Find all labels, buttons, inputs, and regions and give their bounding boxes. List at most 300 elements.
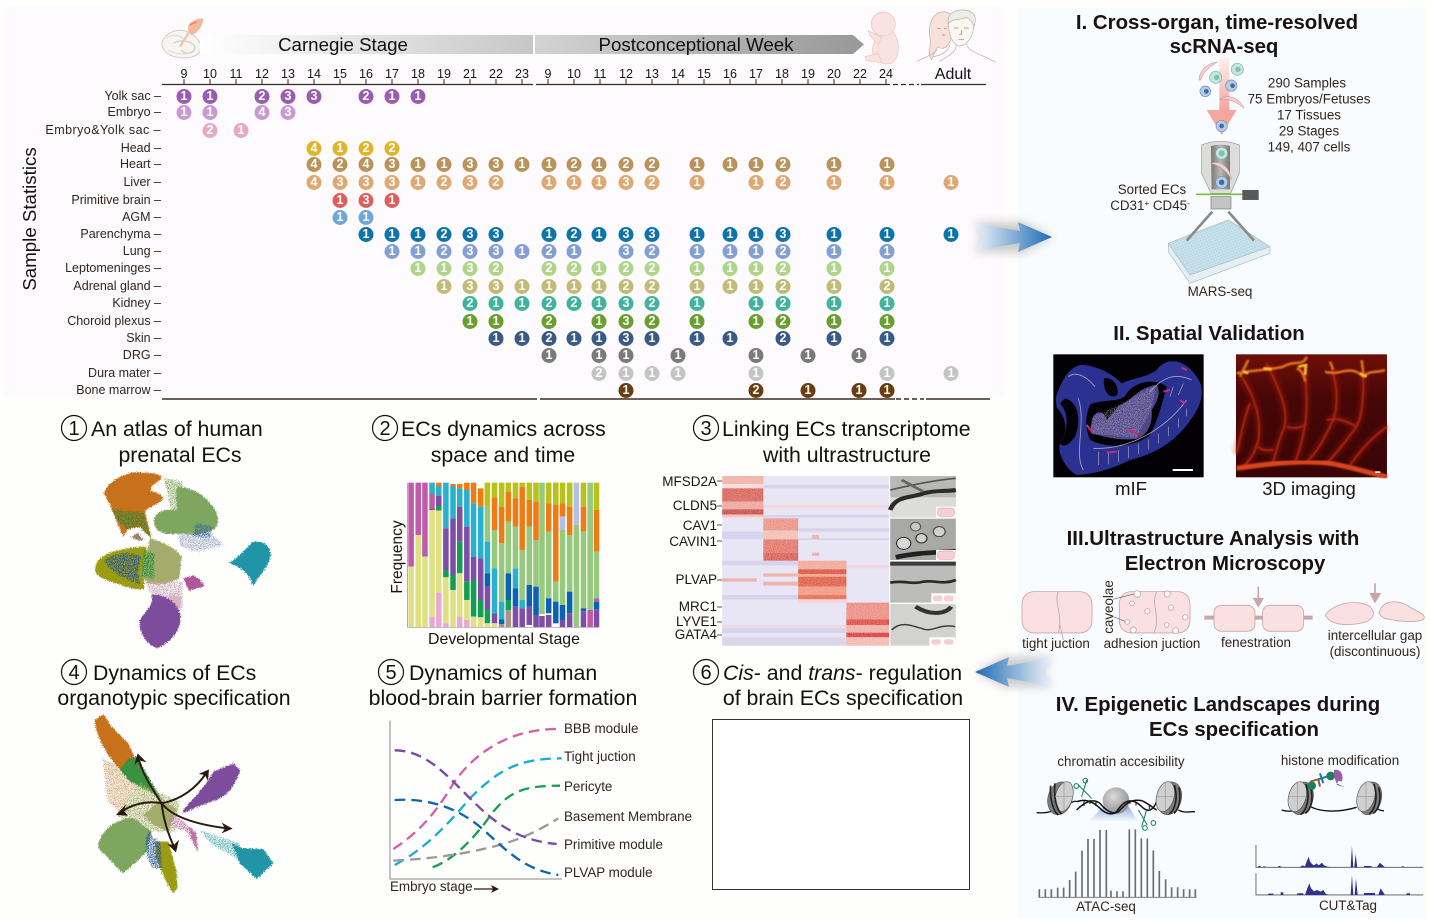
- heading 5: BBB formation: blood-brain barrier formation: [369, 686, 637, 710]
- row: DRG: 1: [596, 348, 602, 362]
- row: Kidney: 3: [623, 296, 629, 310]
- row: Leptomeninges: 3: [467, 261, 473, 275]
- row: Adrenal gland: 3: [493, 279, 499, 293]
- row: Heart: 1: [727, 157, 733, 171]
- row: Liver: 3: [363, 174, 369, 188]
- row: Heart: 1: [694, 157, 700, 171]
- axis: stage ticks: 14: [307, 67, 321, 81]
- row: Kidney: Kidney –: [112, 296, 161, 310]
- row: Liver: 3: [389, 174, 395, 188]
- heading band: Postconceptional Week: [535, 34, 864, 55]
- chart: trajectory embedding: [94, 714, 273, 893]
- row: Bone marrow: 1: [884, 383, 890, 397]
- row: Liver: 1: [546, 174, 552, 188]
- row: Liver: 1: [753, 174, 759, 188]
- row: Yolk sac: 2: [259, 88, 265, 102]
- row: Liver: 4: [311, 174, 317, 188]
- text: sample summary: 290 Samples: [1268, 76, 1346, 90]
- heading 2: dynamics across space and time: space and time: [431, 443, 575, 467]
- row: Yolk sac: 3: [311, 88, 317, 102]
- row: Choroid plexus: 1: [467, 314, 473, 328]
- text: sample summary: [1248, 76, 1371, 154]
- row: Parenchyma: 1: [831, 226, 837, 240]
- labels: marker genes: MRC1: [679, 599, 717, 614]
- axis: stage ticks: 24: [879, 67, 893, 81]
- heading 1: atlas: An atlas of human: [91, 417, 263, 441]
- heading 3: linking transcriptome: Linking ECs transcriptome: [722, 417, 971, 441]
- heading II: spatial validation: II. Spatial Validation: [1113, 323, 1305, 345]
- row: Dura mater: 1: [753, 366, 759, 380]
- labels: marker genes: GATA4: [675, 627, 717, 642]
- row: Head: 2: [389, 140, 395, 154]
- chart: heatmap: [722, 476, 889, 646]
- row: AGM: 1: [363, 210, 369, 224]
- axis: stage ticks: 14: [671, 67, 685, 81]
- heading 4: organotypic specification: [57, 660, 291, 710]
- row: Heart: Heart –: [120, 157, 161, 171]
- row: Bone marrow: 1: [623, 383, 629, 397]
- row: Liver: 1: [415, 174, 421, 188]
- row: Bone marrow: 2: [753, 383, 759, 397]
- row: Adrenal gland: 1: [519, 279, 525, 293]
- row: DRG: 1: [623, 348, 629, 362]
- labels: module names: Basement Membrane: [564, 809, 692, 824]
- row: DRG: 1: [546, 348, 552, 362]
- axis: stage ticks: 22: [853, 67, 867, 81]
- row: Heart: 2: [337, 157, 343, 171]
- row: Lung: 2: [780, 244, 786, 258]
- labels: marker genes: LYVE1: [676, 614, 717, 629]
- row: Choroid plexus: 3: [623, 314, 629, 328]
- row: Lung: 1: [727, 244, 733, 258]
- heading 5: BBB formation: 5: [385, 662, 397, 684]
- labels: module names: Tight juction: [564, 749, 636, 764]
- illustration: sorting workflow: [1168, 57, 1270, 283]
- row: Liver: 2: [493, 174, 499, 188]
- row: Kidney: 2: [649, 296, 655, 310]
- row: Choroid plexus: 2: [649, 314, 655, 328]
- axis: stage ticks: 12: [255, 67, 269, 81]
- label: histone modification: histone modification: [1281, 753, 1399, 768]
- row: Lung: 3: [623, 244, 629, 258]
- row: Leptomeninges: Leptomeninges –: [65, 261, 161, 275]
- labels: marker genes: CAV1: [683, 518, 717, 533]
- row: Parenchyma: 3: [493, 226, 499, 240]
- axis: stage ticks: 16: [723, 67, 737, 81]
- row: Embryo: 1: [207, 105, 213, 119]
- row: Yolk sac: Yolk sac –: [104, 88, 161, 102]
- row: Lung: 1: [753, 244, 759, 258]
- row: Skin: Skin –: [126, 331, 161, 345]
- labels: marker genes: CAVIN1: [669, 534, 717, 549]
- icon: fetus: [865, 12, 898, 64]
- row: Kidney: 1: [493, 296, 499, 310]
- row: Parenchyma: [80, 226, 958, 242]
- row: Choroid plexus: 1: [493, 314, 499, 328]
- row: Parenchyma: 1: [389, 226, 395, 240]
- row: Yolk sac: 1: [181, 88, 187, 102]
- heading 6: cis and trans regulation: of brain ECs specification: [723, 686, 963, 710]
- row: Lung: 1: [831, 244, 837, 258]
- labels: marker genes: [662, 474, 722, 642]
- row: Skin: 1: [519, 331, 525, 345]
- row: Embryo & Yolk sac: [45, 123, 248, 138]
- chart: UMAP atlas: [95, 472, 271, 648]
- heading 4: organotypic specification: 4: [68, 662, 80, 684]
- axis: stage ticks: 12: [619, 67, 633, 81]
- labels: module names: Primitive module: [564, 837, 663, 852]
- image: 3D vasculature: [1236, 354, 1387, 477]
- row: Choroid plexus: 1: [884, 314, 890, 328]
- heading IV: epigenetic landscapes: IV. Epigenetic Landscapes during: [1056, 694, 1380, 716]
- row: Lung: 2: [546, 244, 552, 258]
- label: CUT&Tag: CUT&Tag: [1319, 898, 1377, 913]
- row: Heart: 1: [596, 157, 602, 171]
- axis: stage ticks: 9: [181, 67, 188, 81]
- row: Parenchyma: 1: [363, 226, 369, 240]
- row: Skin: 2: [546, 331, 552, 345]
- labels: marker genes: CLDN5: [673, 498, 717, 513]
- labels: module names: [564, 721, 692, 880]
- axis: stage ticks: 11: [594, 67, 607, 81]
- row: Kidney: 1: [519, 296, 525, 310]
- axis label: Embryo stage with arrow: Embryo stage: [390, 879, 473, 894]
- heading 2: dynamics across space and time: 2: [379, 418, 391, 440]
- panel: sample statistics background: [4, 6, 1004, 397]
- heading I: scRNA-seq: [1076, 12, 1358, 58]
- axis: stage ticks: 15: [333, 67, 347, 81]
- row: Dura mater: 1: [675, 366, 681, 380]
- label: sorted ECs: +: [1144, 199, 1149, 208]
- axis: stage ticks: 22: [489, 67, 503, 81]
- figure: electron micrographs: [890, 476, 956, 646]
- row: Dura mater: Dura mater –: [88, 366, 161, 380]
- chart: ATAC-seq bars: [1038, 829, 1197, 897]
- row: Lung: 3: [467, 244, 473, 258]
- row: Lung: Lung –: [123, 244, 161, 258]
- row: Skin: 1: [571, 331, 577, 345]
- row: Choroid plexus: 2: [780, 314, 786, 328]
- row: Liver: Liver –: [123, 174, 161, 188]
- row: Skin: 1: [493, 331, 499, 345]
- text: sample summary: 75 Embryos/Fetuses: [1248, 92, 1371, 106]
- row: Skin: 1: [727, 331, 733, 345]
- chart: stacked bars by developmental stage: [408, 483, 599, 627]
- row: Lung: 2: [649, 244, 655, 258]
- row: Heart: 1: [519, 157, 525, 171]
- row: Parenchyma: 2: [441, 226, 447, 240]
- row: Primitive brain: Primitive brain –: [71, 192, 161, 206]
- row: Parenchyma: 1: [948, 226, 954, 240]
- heading I: scRNA-seq: scRNA-seq: [1170, 36, 1278, 58]
- row: Heart: [120, 157, 894, 172]
- heading band: Carnegie Stage: Carnegie Stage: [278, 34, 408, 55]
- heading 6: cis and trans regulation: [694, 660, 963, 710]
- row: Skin: 1: [831, 331, 837, 345]
- row: Kidney: 1: [884, 296, 890, 310]
- row: Liver: 3: [623, 174, 629, 188]
- row: Choroid plexus: Choroid plexus –: [67, 314, 161, 328]
- row: Heart: 3: [493, 157, 499, 171]
- row: Embryo & Yolk sac: Embryo&Yolk sac –: [45, 123, 161, 137]
- heading 2: dynamics across space and time: ECs dynamics across: [401, 417, 606, 441]
- row: Leptomeninges: 1: [753, 261, 759, 275]
- row: Embryo: 4: [259, 105, 265, 119]
- text: sample summary: 149, 407 cells: [1268, 140, 1351, 154]
- row: Embryo: Embryo –: [108, 105, 161, 119]
- row: Choroid plexus: 2: [546, 314, 552, 328]
- empty chart frame: [712, 720, 970, 890]
- heading band: Postconceptional Week: Postconceptional Week: [599, 34, 794, 55]
- row: Lung: 3: [493, 244, 499, 258]
- row: DRG: 1: [856, 348, 862, 362]
- row: Leptomeninges: 2: [780, 261, 786, 275]
- row: Adrenal gland: Adrenal gland –: [73, 279, 161, 293]
- row: Leptomeninges: 1: [831, 261, 837, 275]
- row: Lung: 1: [694, 244, 700, 258]
- axis: stage ticks: 13: [645, 67, 659, 81]
- heading III: ultrastructure: [1067, 528, 1359, 575]
- heading 3: linking transcriptome: with ultrastructure: [762, 443, 931, 467]
- row: Kidney: 1: [596, 296, 602, 310]
- row: Lung: 1: [884, 244, 890, 258]
- row: Adrenal gland: 2: [623, 279, 629, 293]
- row: Parenchyma: 3: [623, 226, 629, 240]
- label: ATAC-seq: ATAC-seq: [1076, 899, 1136, 914]
- row: Bone marrow: 1: [856, 383, 862, 397]
- heading IV: epigenetic landscapes: ECs specification: [1149, 719, 1319, 741]
- row: DRG: 1: [753, 348, 759, 362]
- row: DRG: DRG –: [123, 348, 161, 362]
- axis: stage ticks: 23: [515, 67, 529, 81]
- row: Heart: 4: [311, 157, 317, 171]
- row: Heart: 2: [571, 157, 577, 171]
- row: Kidney: 2: [546, 296, 552, 310]
- label: intercellular gap: intercellular gap: [1328, 628, 1422, 643]
- row: Dura mater: 1: [623, 366, 629, 380]
- row: Yolk sac: 3: [285, 88, 291, 102]
- label: intercellular gap: (discontinuous): [1330, 644, 1420, 659]
- row: Liver: 1: [571, 174, 577, 188]
- arrow: to methods: [974, 222, 1052, 253]
- row: Adrenal gland: 1: [831, 279, 837, 293]
- row: Heart: 2: [623, 157, 629, 171]
- row: Head: 4: [311, 140, 317, 154]
- row: Leptomeninges: 2: [546, 261, 552, 275]
- axis: stage ticks: 18: [411, 67, 425, 81]
- row: Heart: 2: [780, 157, 786, 171]
- row: Lung: 1: [571, 244, 577, 258]
- row: Parenchyma: 1: [415, 226, 421, 240]
- heading 2: dynamics across space and time: [372, 416, 606, 467]
- row: Adrenal gland: 1: [546, 279, 552, 293]
- row: Skin: 1: [884, 331, 890, 345]
- heading 1: atlas: prenatal ECs: [118, 443, 242, 467]
- row: Yolk sac: 2: [363, 88, 369, 102]
- text: sample summary: 17 Tissues: [1277, 108, 1341, 122]
- axis: stage ticks: 10: [567, 67, 581, 81]
- axis: stage ticks: 11: [230, 67, 243, 81]
- row: Primitive brain: 1: [337, 192, 343, 206]
- row: Embryo & Yolk sac: 1: [238, 123, 244, 137]
- row: AGM: 1: [337, 210, 343, 224]
- row: Liver: 1: [694, 174, 700, 188]
- label: MARS-seq: MARS-seq: [1188, 284, 1252, 299]
- label: intercellular gap: [1328, 628, 1422, 659]
- arrow: from methods: [975, 657, 1052, 687]
- label: sorted ECs: CD31: [1110, 198, 1144, 213]
- row: Liver: 2: [649, 174, 655, 188]
- row: Choroid plexus: 1: [753, 314, 759, 328]
- heading 3: linking transcriptome: [694, 416, 971, 467]
- row: Adrenal gland: 1: [753, 279, 759, 293]
- row: Lung: 1: [389, 244, 395, 258]
- heading band: Carnegie Stage: [200, 34, 533, 55]
- row: Parenchyma: 2: [571, 226, 577, 240]
- labels: module names: BBB module: [564, 721, 638, 736]
- row: Liver: 2: [441, 174, 447, 188]
- row: Heart: 2: [649, 157, 655, 171]
- row: Parenchyma: 3: [649, 226, 655, 240]
- axis: stage ticks: 20: [827, 67, 841, 81]
- row: Leptomeninges: 1: [727, 261, 733, 275]
- row: Head: [121, 140, 400, 156]
- row: Yolk sac: [104, 88, 426, 104]
- row: Liver: 1: [831, 174, 837, 188]
- heading 4: organotypic specification: organotypic specification: [57, 686, 291, 710]
- row: Choroid plexus: 1: [596, 314, 602, 328]
- axis title: Frequency: Frequency: [389, 520, 406, 594]
- axis: stage ticks: 16: [359, 67, 373, 81]
- row: Skin: 1: [649, 331, 655, 345]
- row: Skin: 3: [623, 331, 629, 345]
- row: Liver: 1: [596, 174, 602, 188]
- heading III: ultrastructure: III.Ultrastructure Analysis with: [1067, 528, 1359, 550]
- row: Head: 1: [337, 140, 343, 154]
- axis: stage ticks: Adult: [935, 66, 972, 83]
- row: Adrenal gland: 1: [571, 279, 577, 293]
- label: fenestration: fenestration: [1221, 635, 1291, 650]
- row: Kidney: 2: [571, 296, 577, 310]
- row: Skin: [126, 331, 894, 346]
- row: Adrenal gland: 1: [596, 279, 602, 293]
- labels: module names: PLVAP module: [564, 865, 653, 880]
- row: Heart: 3: [467, 157, 473, 171]
- row: Adrenal gland: 2: [884, 279, 890, 293]
- row: Parenchyma: Parenchyma –: [80, 226, 161, 240]
- row: Embryo & Yolk sac: 2: [207, 123, 213, 137]
- row: Heart: 1: [831, 157, 837, 171]
- row: Kidney: 2: [780, 296, 786, 310]
- row: Dura mater: 2: [596, 366, 602, 380]
- axis: stage ticks: [162, 66, 986, 84]
- row: Adrenal gland: 1: [694, 279, 700, 293]
- row: Parenchyma: 1: [884, 226, 890, 240]
- image: mIF embryo section: [1053, 354, 1204, 477]
- label: caveolae: caveolae: [1101, 580, 1116, 634]
- row: Liver: 3: [467, 174, 473, 188]
- axis: stage ticks: 15: [697, 67, 711, 81]
- row: AGM: [122, 210, 374, 225]
- diagram: ATAC chromatin: [1037, 778, 1195, 830]
- row: Heart: 1: [441, 157, 447, 171]
- row: Primitive brain: [71, 192, 400, 208]
- row: Choroid plexus: 1: [831, 314, 837, 328]
- row: Heart: 4: [363, 157, 369, 171]
- heading 5: BBB formation: [369, 660, 637, 710]
- panel: methods background: [1017, 8, 1425, 918]
- row: Lung: 1: [415, 244, 421, 258]
- row: Leptomeninges: 1: [441, 261, 447, 275]
- row: Choroid plexus: [67, 314, 894, 329]
- chart: module dynamics curves: [390, 721, 562, 879]
- row: Adrenal gland: [73, 279, 894, 294]
- row: Lung: 2: [441, 244, 447, 258]
- chart: CUT and Tag tracks: [1256, 845, 1423, 895]
- axis: stage ticks: 13: [281, 67, 295, 81]
- row: Kidney: 2: [467, 296, 473, 310]
- row: Choroid plexus: 1: [694, 314, 700, 328]
- row: Liver: 1: [948, 174, 954, 188]
- row: Leptomeninges: [65, 261, 894, 276]
- row: Leptomeninges: 2: [649, 261, 655, 275]
- labels: module names: Pericyte: [564, 779, 612, 794]
- label: mIF: mIF: [1115, 478, 1147, 499]
- row: Skin: 1: [694, 331, 700, 345]
- heading 6: cis and trans regulation: 6: [700, 662, 712, 684]
- label: sorted ECs: Sorted ECs: [1118, 182, 1187, 197]
- heading III: ultrastructure: Electron Microscopy: [1125, 553, 1326, 575]
- row: Liver: 3: [337, 174, 343, 188]
- row: Heart: 1: [753, 157, 759, 171]
- row: AGM: AGM –: [122, 210, 161, 224]
- heading 6: cis and trans regulation: Cis- and trans- regulation: [723, 661, 962, 685]
- label: adhesion junction: adhesion juction: [1104, 636, 1200, 651]
- diagrams: junction types: [1022, 583, 1424, 640]
- row: Lung: 1: [519, 244, 525, 258]
- row: Embryo: [108, 105, 296, 120]
- label: sorted ECs: [1110, 182, 1190, 213]
- axis: stage ticks: 9: [545, 67, 552, 81]
- axis title: Sample Statistics: Sample Statistics: [19, 147, 40, 291]
- row: Adrenal gland: 1: [441, 279, 447, 293]
- row: Leptomeninges: 2: [571, 261, 577, 275]
- row: Yolk sac: 1: [207, 88, 213, 102]
- row: Embryo: 3: [285, 105, 291, 119]
- row: Embryo: 1: [181, 105, 187, 119]
- row: Adrenal gland: 2: [649, 279, 655, 293]
- axis: stage ticks: 21: [463, 67, 477, 81]
- row: Bone marrow: 1: [805, 383, 811, 397]
- row: DRG: 1: [675, 348, 681, 362]
- heading 5: BBB formation: Dynamics of human: [409, 661, 597, 685]
- row: Dura mater: 1: [948, 366, 954, 380]
- row: Heart: 1: [884, 157, 890, 171]
- heading 1: atlas: [62, 416, 263, 467]
- row: Parenchyma: 1: [546, 226, 552, 240]
- row: Parenchyma: 3: [780, 226, 786, 240]
- row: Skin: 2: [780, 331, 786, 345]
- axis: stage ticks: 17: [749, 67, 763, 81]
- row: Kidney: 1: [831, 296, 837, 310]
- axis title: Developmental Stage: Developmental Stage: [428, 631, 580, 648]
- diagram: histone modification: [1282, 770, 1385, 817]
- axis: stage ticks: 19: [801, 67, 815, 81]
- row: Kidney: 1: [694, 296, 700, 310]
- row: Leptomeninges: 2: [493, 261, 499, 275]
- row: Leptomeninges: 1: [694, 261, 700, 275]
- row: Parenchyma: 1: [727, 226, 733, 240]
